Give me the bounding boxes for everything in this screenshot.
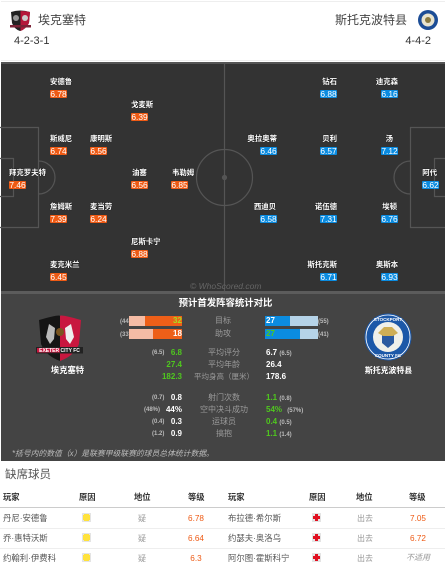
bar chart: assists: 27 <box>266 329 275 338</box>
home player: 油塞: 6.56 <box>131 180 148 190</box>
missing players heading: 缺席球员 <box>5 469 51 481</box>
row 3: 6.3 <box>190 554 202 563</box>
stat row: aerial duels: 44% <box>166 405 182 414</box>
home player: 油塞 <box>131 168 148 190</box>
bar chart: assists: 18 <box>173 329 182 338</box>
stat row: average height: 182.3 <box>162 372 182 381</box>
away player: 阿代: 6.62 <box>422 180 439 190</box>
away player: 阿代: 阿代 <box>422 168 437 177</box>
home player: 斯威尼 <box>50 134 72 156</box>
home player: 麦当劳 <box>90 202 112 224</box>
icon: injured <box>312 533 321 542</box>
away player: 汤: 汤 <box>386 134 393 143</box>
away player: 斯托克斯: 斯托克斯 <box>307 260 337 269</box>
stat row: aerial duels: 54% (57%) <box>266 405 303 414</box>
away player: 钻石 <box>320 77 337 99</box>
stats heading: 预计首发阵容统计对比 <box>179 297 272 308</box>
stat row: shots <box>152 393 292 402</box>
home player: 戈麦斯: 戈麦斯 <box>131 100 153 109</box>
away player: 奥拉奥蒂: 奥拉奥蒂 <box>247 134 277 143</box>
stat row: average rating <box>152 348 292 357</box>
stat row: average age: 27.4 <box>166 360 182 369</box>
bar chart: assists: (33) <box>120 332 131 338</box>
bar chart: goals: (44) <box>120 319 131 325</box>
away player: 钻石: 6.88 <box>320 89 337 99</box>
away player: 斯托克斯: 6.71 <box>320 272 337 282</box>
icon: doubtful <box>82 553 91 562</box>
away player: 钻石: 钻石 <box>322 77 337 86</box>
stat row: average rating: 6.7 (6.5) <box>266 348 292 357</box>
table header: 原因 <box>309 492 326 502</box>
stat row: average age <box>166 360 282 369</box>
icon: Exeter crest large: EXETER CITY FC <box>39 348 80 354</box>
stat row: aerial duels <box>144 405 303 414</box>
home player: 韦勒姆 <box>171 168 194 190</box>
home player: 麦克米兰 <box>50 260 80 282</box>
stat row: tackles <box>152 429 292 438</box>
stat row: average height: 平均身高（厘米） <box>194 372 254 381</box>
home player: 戈麦斯: 6.39 <box>131 112 148 122</box>
footnote: *括号内的数值（x）是联赛甲级联赛的球员总体统计数据。 <box>12 449 214 458</box>
row 3: 出去 <box>357 554 373 563</box>
row 2: 6.72 <box>410 534 426 543</box>
away player: 奥斯本: 奥斯本 <box>376 260 398 269</box>
away player: 西迪贝 <box>254 202 277 224</box>
icon: doubtful <box>82 533 91 542</box>
table header: 等级 <box>409 492 426 502</box>
stat row: tackles: 0.9 <box>171 429 182 438</box>
home player: 尼斯卡宁: 6.88 <box>131 249 148 259</box>
pitch markings <box>0 64 445 291</box>
table header: 地位 <box>356 492 373 502</box>
home player: 麦克米兰: 麦克米兰 <box>50 260 80 269</box>
row 3: 阿尔图·霍斯科宁 <box>228 553 289 563</box>
away player: 诺伍德: 7.31 <box>320 214 337 224</box>
panel: lineup stats comparison <box>1 291 445 461</box>
table: missing players <box>0 492 445 563</box>
home player: 詹姆斯: 詹姆斯 <box>50 202 72 211</box>
stat row: tackles: (1.2) <box>152 431 164 437</box>
row 1 <box>0 508 445 529</box>
bar chart: assists: (41) <box>318 332 329 338</box>
home player: 康明斯: 6.56 <box>90 146 107 156</box>
stat row: average age: 平均年龄 <box>208 360 240 369</box>
bar chart: goals: 32 <box>173 316 182 325</box>
home player: 油塞: 油塞 <box>132 168 147 177</box>
row 3: 不适用 <box>406 553 430 562</box>
stat row: aerial duels: (48%) <box>144 407 160 413</box>
home player: 麦当劳: 麦当劳 <box>90 202 112 211</box>
icon: Exeter crest large <box>36 316 83 361</box>
away player: 诺伍德: 诺伍德 <box>315 202 337 211</box>
stat row: average rating: 平均评分 <box>208 348 240 357</box>
home formation: 4-2-3-1 <box>14 35 49 47</box>
away player: 贝利: 贝利 <box>322 134 337 143</box>
row 2: 约瑟夫·奥洛乌 <box>228 533 281 543</box>
row 3: 约翰利·伊费科 <box>3 553 56 563</box>
home player: 拜克罗夫特: 7.46 <box>9 180 26 190</box>
home player: 康明斯 <box>90 134 112 156</box>
row 1: 6.78 <box>188 514 204 523</box>
pitch <box>1 62 445 292</box>
row 2: 6.64 <box>188 534 204 543</box>
away player: 埃顿: 埃顿 <box>382 202 397 211</box>
table header <box>0 490 445 508</box>
away team name: 斯托克波特县 <box>335 13 407 27</box>
stat row: average height: 178.6 <box>266 372 286 381</box>
row 2 <box>0 528 445 549</box>
icon: Exeter crest small <box>10 10 31 31</box>
away player: 汤 <box>381 134 398 156</box>
away player: 西迪贝: 西迪贝 <box>254 202 276 211</box>
icon: Stockport crest large: COUNTY FC <box>375 353 402 358</box>
away player: 埃顿 <box>381 202 398 224</box>
home player: 韦勒姆: 6.85 <box>171 180 188 190</box>
table header: 等级 <box>188 492 205 502</box>
stat row: tackles: 搞抱 <box>216 429 232 438</box>
bar chart: assists <box>120 329 329 339</box>
table header: 玩家 <box>228 492 245 502</box>
assists label: 助攻 <box>215 329 231 338</box>
row 3 <box>3 553 431 563</box>
table header: 地位 <box>134 492 151 502</box>
stat row: dribbles: 运球员 <box>212 417 236 426</box>
row 1: 布拉德·希尔斯 <box>228 513 281 523</box>
icon: doubtful <box>82 513 91 522</box>
home player: 詹姆斯 <box>50 202 72 224</box>
away player: 奥斯本 <box>376 260 398 282</box>
away player: 诺伍德 <box>315 202 337 224</box>
stat row: dribbles <box>152 417 292 426</box>
home player: 韦勒姆: 韦勒姆 <box>172 168 194 177</box>
home player: 戈麦斯 <box>131 100 153 122</box>
row 1: 疑 <box>138 514 146 523</box>
icon: Stockport crest small <box>418 10 438 30</box>
row 2: 乔·惠特沃斯 <box>3 533 48 543</box>
stat row: dribbles: (0.4) <box>152 419 164 425</box>
away formation: 4-4-2 <box>405 35 431 47</box>
home player: 斯威尼: 斯威尼 <box>50 134 72 143</box>
row 1: 出去 <box>357 514 373 523</box>
bar chart: goals: 27 <box>266 316 275 325</box>
home player: 斯威尼: 6.74 <box>50 146 67 156</box>
row 3: 疑 <box>138 554 146 563</box>
home team name: 埃克塞特 <box>38 13 86 27</box>
away player: 贝利 <box>320 134 337 156</box>
stat row: shots: (0.7) <box>152 395 164 401</box>
watermark: © WhoScored.com <box>190 281 261 291</box>
stat row: aerial duels: 空中决斗成功 <box>200 405 248 414</box>
home player: 詹姆斯: 7.39 <box>50 214 67 224</box>
home player: 拜克罗夫特 <box>9 168 46 190</box>
stat row: shots: 射门次数 <box>208 393 240 402</box>
home player: 麦当劳: 6.24 <box>90 214 107 224</box>
home player: 尼斯卡宁 <box>131 237 161 259</box>
icon: injured <box>312 553 321 562</box>
stat row: shots: 0.8 <box>171 393 182 402</box>
home player: 安德鲁: 6.78 <box>50 89 67 99</box>
away player: 迪克森: 迪克森 <box>376 77 398 86</box>
away player: 斯托克斯 <box>307 260 337 282</box>
table header: 原因 <box>79 492 96 502</box>
stat row: average age: 26.4 <box>266 360 282 369</box>
away player: 汤: 7.12 <box>381 146 398 156</box>
table header: 玩家 <box>3 492 20 502</box>
away player: 西迪贝: 6.58 <box>260 214 277 224</box>
away player: 迪克森 <box>376 77 398 99</box>
away player: 奥斯本: 6.93 <box>381 272 398 282</box>
bar chart: goals: (55) <box>318 319 329 325</box>
goals label: 目标 <box>215 316 231 325</box>
row 2: 疑 <box>138 534 146 543</box>
away player: 贝利: 6.57 <box>320 146 337 156</box>
away player: 奥拉奥蒂 <box>247 134 277 156</box>
home player: 尼斯卡宁: 尼斯卡宁 <box>131 237 161 246</box>
away player: 迪克森: 6.16 <box>381 89 398 99</box>
away player: 奥拉奥蒂: 6.46 <box>260 146 277 156</box>
home player: 安德鲁: 安德鲁 <box>50 77 72 86</box>
stat row: average rating: (6.5) <box>152 350 164 356</box>
home player: 拜克罗夫特: 拜克罗夫特 <box>9 168 46 177</box>
stat row: tackles: 1.1 (1.4) <box>266 429 292 438</box>
stat row: average height <box>162 372 286 381</box>
header: team names and formations <box>1 1 445 61</box>
away player: 埃顿: 6.76 <box>381 214 398 224</box>
bar chart: goals <box>120 316 329 326</box>
row 2: 出去 <box>357 534 373 543</box>
icon: Stockport crest large: STOCKPORT <box>374 317 402 322</box>
home player: 安德鲁 <box>50 77 72 99</box>
icon: injured <box>312 513 321 522</box>
home team label: 埃克塞特 <box>51 365 84 375</box>
stat row: average rating: 6.8 <box>171 348 182 357</box>
row 1: 7.05 <box>410 514 426 523</box>
home player: 麦克米兰: 6.45 <box>50 272 67 282</box>
stat row: shots: 1.1 (0.8) <box>266 393 292 402</box>
row 1: 丹尼·安德鲁 <box>3 513 48 523</box>
home player: 康明斯: 康明斯 <box>90 134 112 143</box>
stat row: dribbles: 0.4 (0.5) <box>266 417 292 426</box>
away team label: 斯托克波特县 <box>365 366 412 375</box>
icon: Stockport crest large <box>364 314 412 360</box>
stat row: dribbles: 0.3 <box>171 417 182 426</box>
away player: 阿代 <box>422 168 439 190</box>
